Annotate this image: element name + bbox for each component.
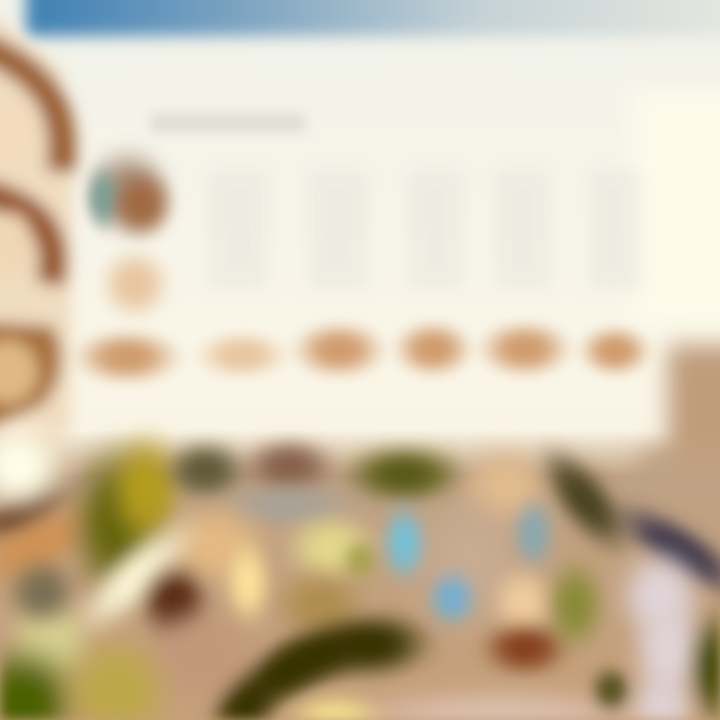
dark tree line: [513, 420, 657, 580]
dark olive hedge: [190, 595, 446, 720]
road: [608, 537, 714, 720]
tan walkway: [449, 438, 561, 538]
title placeholder: [150, 114, 305, 132]
lower left pink ground: [120, 591, 280, 719]
white structure: [0, 408, 78, 524]
olive tree highlight: [102, 420, 190, 560]
small shrub: [336, 534, 384, 586]
pool 2: [422, 564, 482, 632]
left building: [0, 0, 72, 510]
yellow highlight: [277, 688, 393, 720]
garden base: [0, 430, 720, 720]
dark road band: [587, 475, 720, 625]
pale plaza: [398, 472, 542, 648]
tan dome: [154, 493, 278, 597]
cream pavilion: [485, 559, 561, 647]
tree cluster: [332, 438, 476, 510]
dark terrace edge: [0, 461, 94, 563]
tan ground: [264, 559, 376, 651]
pink ground: [290, 678, 710, 720]
pool 3: [507, 489, 559, 577]
bottom left green: [0, 632, 94, 720]
grey shadow: [0, 550, 84, 634]
right building: [640, 345, 720, 535]
olive tree: [60, 427, 176, 623]
landscape details: [0, 408, 720, 720]
icon: circular emblem: [76, 138, 180, 246]
pale olive garden: [276, 506, 388, 590]
sky: [26, 0, 720, 36]
grey plaza: [204, 477, 374, 533]
white diagonal path: [44, 490, 226, 666]
terrace roof: [233, 432, 345, 500]
green shrub right: [539, 551, 611, 659]
top trees: [155, 434, 255, 506]
icon: small tan shape: [93, 242, 177, 326]
small dark shrub: [585, 661, 637, 719]
pool 1: [377, 497, 431, 589]
right bright wall: [630, 90, 720, 330]
bottom yellow-olive: [47, 620, 183, 720]
yellow light: [220, 531, 276, 635]
red-brown pavilion: [473, 614, 577, 682]
pale green patch: [0, 582, 102, 698]
column text blocks: [208, 170, 640, 290]
orange terrace: [0, 473, 133, 617]
row of tan labels: [65, 316, 657, 389]
brown arch: [133, 555, 217, 651]
right green shrub: [680, 596, 720, 720]
